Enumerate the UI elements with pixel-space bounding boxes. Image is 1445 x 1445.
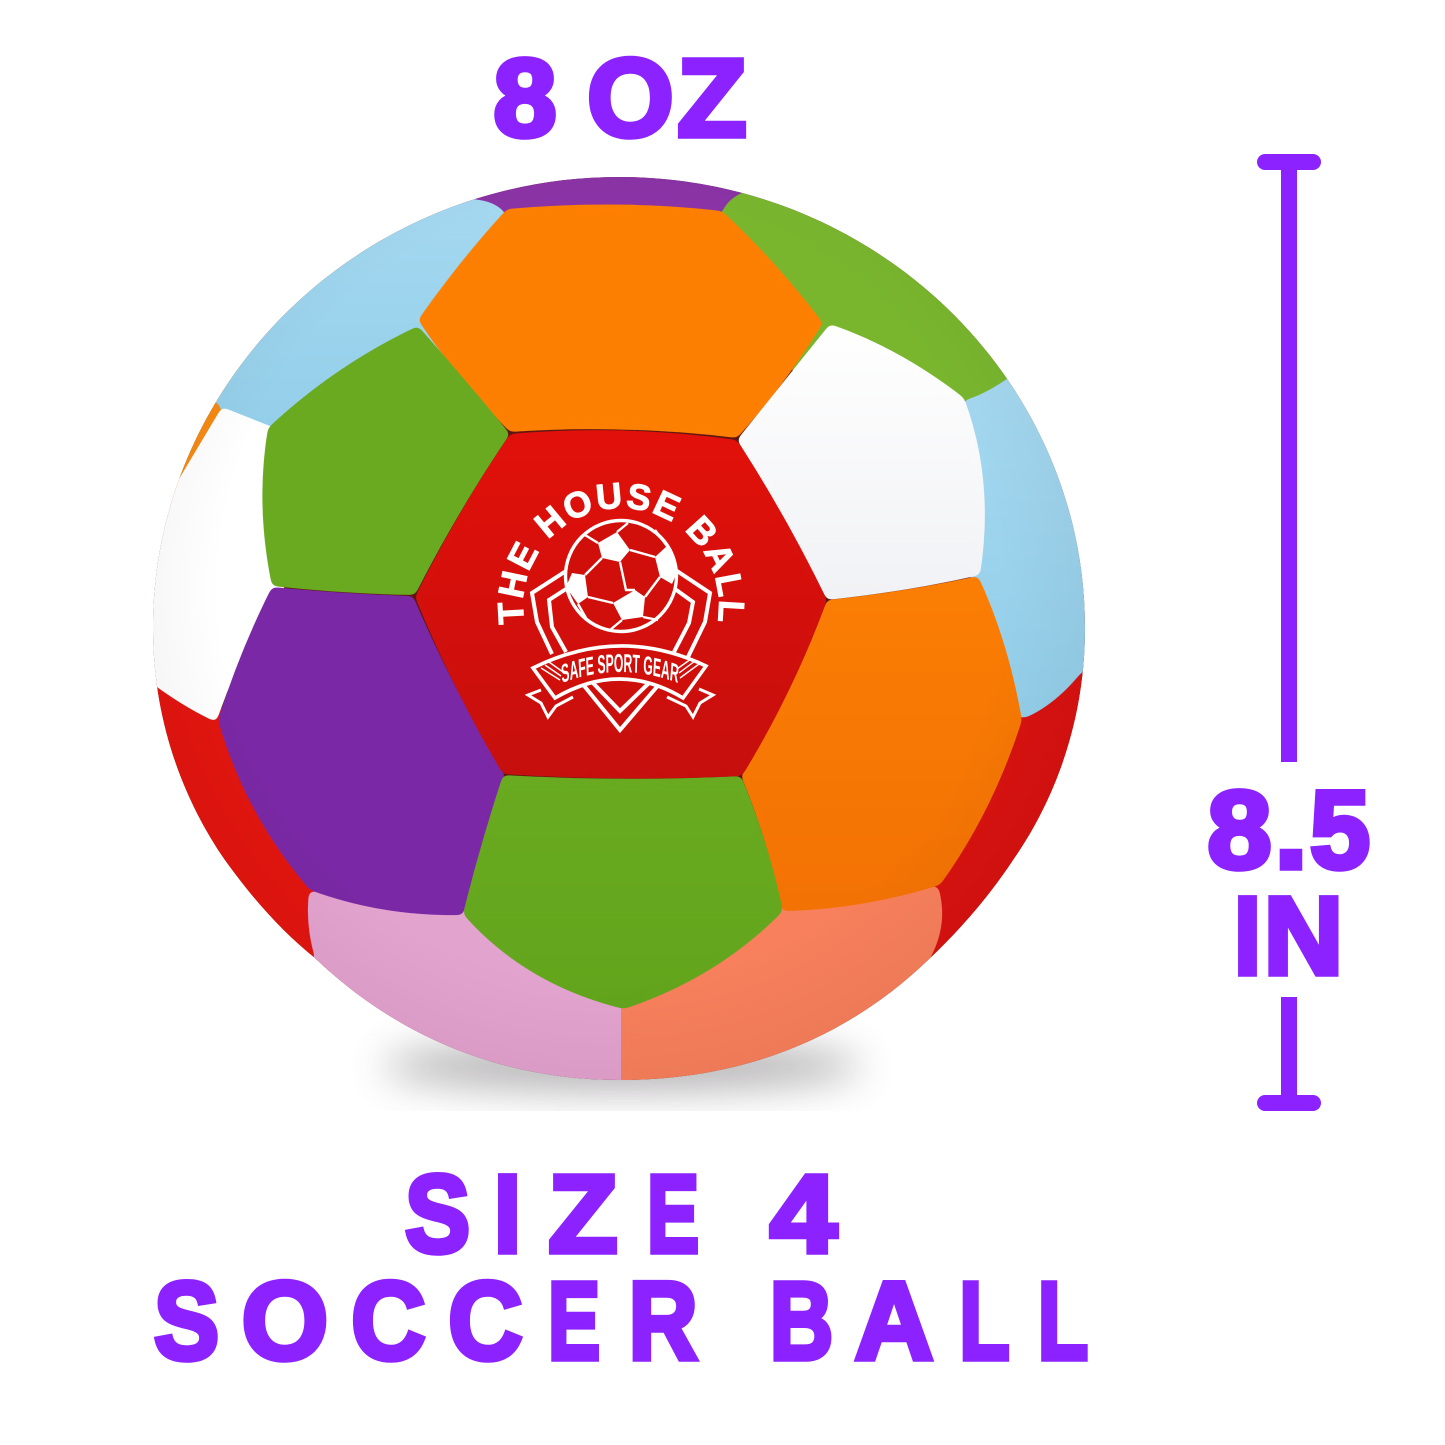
- panel: red centre: [415, 430, 827, 779]
- diameter dimension line: [1257, 154, 1321, 1111]
- upper bar: [1257, 154, 1321, 170]
- product size title: C: [448, 1260, 523, 1383]
- product size title: 4: [770, 1153, 837, 1276]
- panel: purple top: [464, 177, 766, 212]
- panel: white right: [737, 324, 985, 600]
- product size title: [154, 1153, 1088, 1383]
- diameter label: .: [1275, 769, 1307, 892]
- diameter label: N: [1264, 875, 1343, 998]
- panel: red left: [156, 681, 330, 972]
- panel: light blue right: [965, 364, 1085, 718]
- product size title: E: [548, 1260, 600, 1383]
- panel: green left: [262, 326, 510, 595]
- product size title: Z: [548, 1153, 618, 1276]
- panel: green bottom: [463, 775, 783, 1009]
- panel: orange top: [418, 204, 823, 438]
- product size title: C: [351, 1260, 426, 1383]
- panel: lime green top right: [722, 193, 1007, 402]
- logo shield: [532, 571, 710, 730]
- product size title: A: [855, 1260, 933, 1383]
- panel: white left: [153, 408, 284, 720]
- logo arc text: THE HOUSE BALL: [497, 482, 745, 625]
- weight label: O: [587, 37, 674, 160]
- product size title: L: [959, 1260, 1010, 1383]
- panel: coral bottom right: [620, 886, 942, 1080]
- diameter label: 5: [1310, 769, 1370, 892]
- banner hatching: [541, 659, 699, 680]
- panel: purple left: [218, 587, 505, 915]
- product size title: L: [1038, 1260, 1088, 1383]
- weight label: 8: [494, 37, 556, 160]
- product size title: R: [629, 1260, 698, 1383]
- logo: The House Ball: [497, 482, 745, 734]
- ball edge shading: [156, 536, 1085, 1080]
- lower bar: [1281, 997, 1297, 1103]
- product size title: B: [770, 1260, 833, 1383]
- product size title: I: [494, 1153, 521, 1276]
- diameter label: 8: [1208, 769, 1272, 892]
- panel: light blue top left: [216, 199, 504, 426]
- logo banner: [524, 644, 716, 720]
- infographic canvas: [153, 56, 1370, 1363]
- product size title: S: [405, 1153, 470, 1276]
- diameter label: I: [1234, 875, 1261, 998]
- panel: red right: [920, 666, 1084, 968]
- product size title: S: [154, 1260, 219, 1383]
- logo ball: [566, 520, 678, 632]
- ball ground shadow: [382, 1042, 862, 1090]
- soccer ball: [153, 177, 1085, 1080]
- product size title: E: [647, 1153, 699, 1276]
- panel: orange sliver left: [172, 366, 240, 500]
- product size title: O: [242, 1260, 328, 1383]
- weight label: Z: [677, 37, 747, 160]
- diameter label: [1208, 769, 1370, 998]
- panel: pink bottom left: [308, 892, 632, 1080]
- banner text: SAFE SPORT GEAR: [562, 654, 678, 683]
- panel: orange right: [741, 576, 1022, 911]
